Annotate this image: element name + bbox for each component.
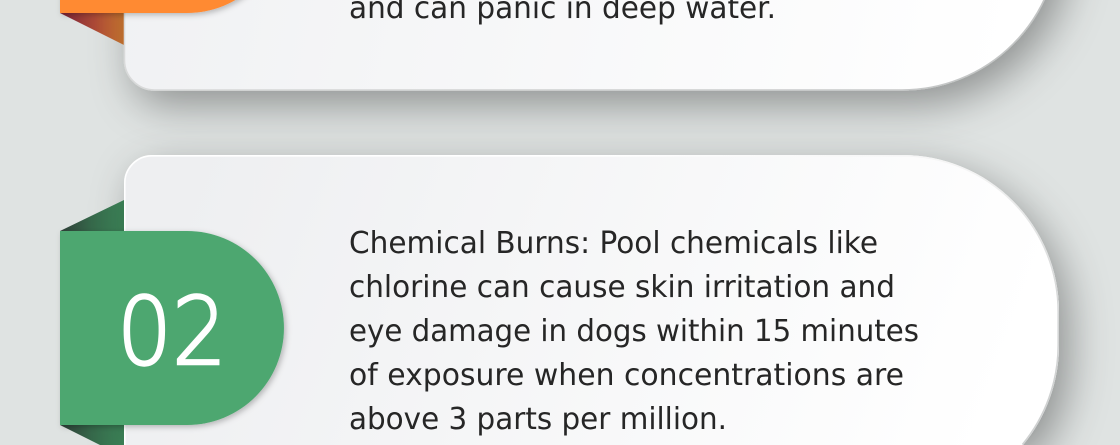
icon: green ribbon folds: [60, 200, 124, 445]
card 02 text: chlorine can cause skin irritation and: [349, 270, 895, 305]
icon: orange ribbon fold: [60, 13, 124, 45]
panel: hazard 01: [60, 0, 1059, 90]
card 02 text: above 3 parts per million.: [349, 402, 727, 437]
green number tab: [60, 231, 284, 425]
card 02 text: Chemical Burns: Pool chemicals like: [349, 226, 878, 261]
card 01: [124, 0, 1059, 90]
card 02 text: [349, 226, 919, 437]
card 02: [124, 155, 1059, 445]
card 02 bevel edge: [125, 156, 1058, 445]
orange number tab: [60, 0, 284, 13]
card 02 text: of exposure when concentrations are: [349, 358, 904, 393]
tab shape: [60, 231, 284, 425]
card 02 text: eye damage in dogs within 15 minutes: [349, 314, 919, 349]
number 02: 02: [117, 278, 227, 387]
panel: hazard 02: [60, 155, 1059, 445]
